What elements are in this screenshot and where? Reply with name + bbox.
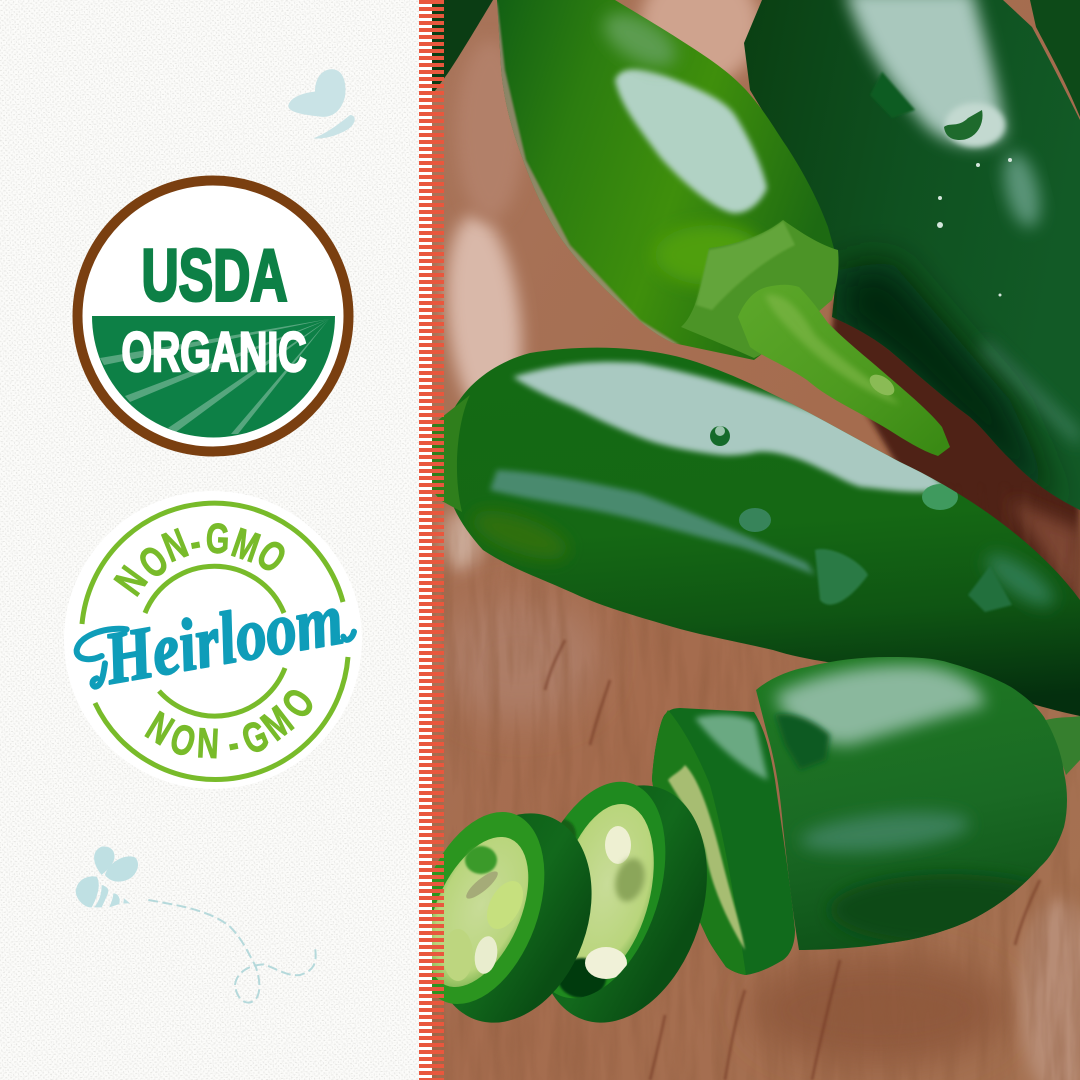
droplet on stem: [870, 374, 894, 396]
slice: third, tall: [652, 708, 795, 975]
top NON-GMO: [105, 514, 295, 603]
top NON-GMO: O: [248, 530, 295, 582]
cut face: [652, 710, 746, 975]
Heirloom script: Heirloom: [98, 578, 349, 701]
icon: bee with dashed flight path: [76, 846, 316, 1003]
cut face: [432, 812, 544, 1004]
bottom NON-GMO: O: [165, 714, 201, 766]
stem highlight: [765, 295, 900, 405]
pepper: large top right: [740, 0, 1080, 510]
bottom NON-GMO: [138, 680, 324, 767]
top NON-GMO: N: [156, 519, 194, 571]
slice: second round: [552, 782, 707, 1023]
slice: first round: [432, 812, 592, 1023]
pepper: top centre with highlight: [490, 0, 950, 456]
central void: [465, 846, 497, 874]
icon: butterfly: [288, 69, 355, 139]
top NON-GMO: -: [186, 518, 204, 566]
left calyx of middle pepper: [432, 395, 470, 512]
panel: fabric background: [0, 0, 432, 1080]
green lower half: [92, 316, 335, 438]
inner flesh: [576, 804, 654, 960]
bottom NON-GMO: M: [253, 697, 301, 749]
pale flesh: [668, 765, 745, 950]
badge: Non-GMO Heirloom: [64, 491, 362, 789]
wooden cutting board: [432, 0, 1080, 1080]
pepper: top-left corner: [432, 0, 493, 95]
ORGANIC wordmark: ORGANIC: [122, 320, 306, 383]
badge: USDA Organic: [78, 180, 348, 452]
stem: [738, 285, 950, 456]
cut face: [554, 782, 666, 998]
calyx highlight: [696, 221, 795, 310]
dark voids: [558, 958, 606, 998]
decorative red striped border: [419, 0, 444, 1080]
photo: jalapeños on wooden board: [391, 0, 1080, 1080]
bottom NON-GMO: O: [272, 680, 324, 727]
bottom NON-GMO: N: [196, 719, 220, 767]
short stem: [1046, 716, 1080, 775]
seeds: [605, 826, 631, 864]
top NON-GMO: O: [130, 536, 177, 588]
rings: [82, 503, 348, 780]
seeds and membrane: [474, 936, 498, 974]
pepper: top-right corner: [1030, 0, 1080, 117]
white backing: [64, 491, 362, 789]
field rays: [100, 319, 329, 434]
seal ring: [78, 180, 348, 452]
calyx: [681, 220, 839, 358]
membrane shading: [612, 856, 647, 904]
inner flesh: [432, 837, 528, 987]
bottom NON-GMO: G: [235, 711, 275, 763]
top NON-GMO: G: [205, 514, 231, 562]
pepper: lower right cut: [750, 650, 1080, 955]
USDA wordmark: USDA: [142, 236, 288, 316]
bottom NON-GMO: N: [138, 702, 181, 754]
Heirloom script swashes: [77, 629, 354, 687]
top NON-GMO: M: [226, 519, 266, 571]
skin highlight: [695, 715, 768, 780]
pepper: middle long: [432, 340, 1080, 720]
top NON-GMO: N: [105, 558, 156, 603]
bottom NON-GMO: -: [224, 719, 242, 767]
